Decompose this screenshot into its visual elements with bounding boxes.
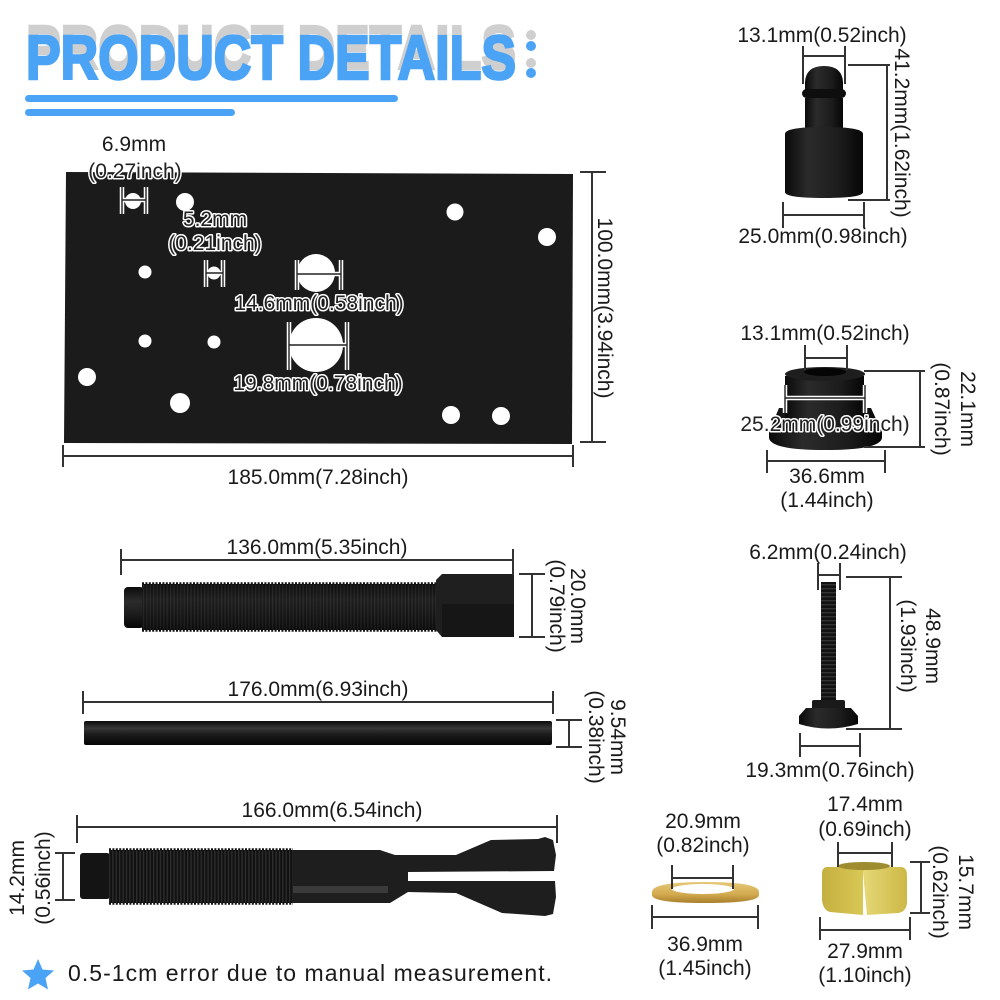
washer drawing [652, 882, 759, 903]
bolt dimensions: 136.0mm(5.35inch) [227, 536, 407, 559]
panel: mounting plate [63, 133, 616, 489]
plate height dimension [580, 172, 616, 442]
split bolt dimensions: (0.56inch) [32, 831, 55, 925]
bushing dimensions [740, 322, 979, 512]
split bolt dimensions: 14.2mm [6, 840, 29, 916]
note: measurement error [22, 959, 552, 990]
nut dimensions: 27.9mm [827, 940, 903, 963]
plate hole labels: 19.8mm(0.78inch) [233, 372, 403, 395]
split bolt dimensions: 166.0mm(6.54inch) [242, 799, 422, 822]
bolt dimensions [121, 536, 589, 653]
note text: 0.5-1cm error due to manual measurement. [68, 960, 552, 986]
panel: threaded bolt with hex head [121, 536, 589, 653]
hole dimension markers [122, 187, 347, 370]
title: product details: PRODUCT DETAILS [26, 24, 516, 93]
nut dimensions: 17.4mm [827, 793, 903, 816]
nut dimensions: (0.69inch) [818, 818, 912, 841]
rod dimensions: 9.54mm [606, 699, 629, 775]
bushing dimensions: 36.6mm [789, 465, 865, 488]
title: product details: PRODUCT DETAILS [26, 14, 516, 83]
rod dimensions: (0.38inch) [584, 690, 607, 784]
plate width dimension: 185.0mm(7.28inch) [228, 466, 408, 489]
bolt dimensions: (0.79inch) [545, 559, 568, 653]
bolt dimensions: 20.0mm [566, 568, 589, 644]
panel: smooth rod [83, 678, 629, 784]
panel: split forcing bolt [6, 799, 557, 925]
panel: flanged bushing [740, 322, 979, 512]
pin drawing [785, 66, 863, 198]
pin dimensions: 25.0mm(0.98inch) [738, 225, 908, 248]
rod dimensions: 176.0mm(6.93inch) [228, 678, 408, 701]
plate hole labels: (0.21inch) [168, 232, 262, 255]
nut dimensions [818, 793, 977, 987]
panel: thumb screw [745, 541, 944, 782]
bushing dimensions: 25.2mm(0.99inch) [740, 413, 910, 436]
pin dimensions: 13.1mm(0.52inch) [737, 24, 907, 47]
rod dimensions [83, 678, 629, 784]
washer dimensions: (1.45inch) [658, 957, 752, 980]
split bolt drawing [80, 837, 556, 916]
screw dimensions: 6.2mm(0.24inch) [749, 541, 907, 564]
panel: brass hex nut [818, 793, 977, 987]
washer dimensions: 20.9mm [665, 810, 741, 833]
screw drawing [799, 582, 858, 728]
panel: brass washer [652, 810, 759, 980]
panel: stepped pin adapter [737, 24, 913, 248]
screw dimensions: 48.9mm [921, 608, 944, 684]
bushing drawing [769, 367, 882, 450]
plate width dimension [63, 445, 573, 489]
icon: blue star [22, 959, 54, 990]
bolt drawing [124, 574, 514, 637]
plate hole labels [88, 133, 404, 395]
nut dimensions: (0.62inch) [928, 845, 951, 939]
nut drawing [822, 862, 907, 915]
screw dimensions: 19.3mm(0.76inch) [745, 759, 915, 782]
screw dimensions [745, 541, 944, 782]
split bolt dimensions [6, 799, 557, 925]
washer dimensions: 36.9mm [667, 933, 743, 956]
plate body with holes [64, 172, 573, 444]
plate hole labels: 5.2mm [183, 208, 247, 231]
nut dimensions: (1.10inch) [818, 964, 912, 987]
plate hole labels: 14.6mm(0.58inch) [234, 292, 404, 315]
plate hole labels: (0.27inch) [88, 160, 182, 183]
nut dimensions: 15.7mm [954, 854, 977, 930]
washer dimensions [652, 810, 758, 980]
title underline bars [25, 95, 398, 116]
screw dimensions: (1.93inch) [896, 599, 919, 693]
plate height dimension: 100.0mm(3.94inch) [593, 218, 616, 398]
bushing dimensions: 13.1mm(0.52inch) [740, 322, 910, 345]
bushing dimensions: (0.87inch) [930, 362, 953, 456]
bushing dimensions: 22.1mm [956, 371, 979, 447]
pin dimensions: 41.2mm(1.62inch) [890, 48, 913, 218]
washer dimensions: (0.82inch) [656, 834, 750, 857]
rod drawing [84, 721, 552, 745]
pin dimensions [737, 24, 913, 248]
plate hole labels: 6.9mm [102, 133, 166, 156]
bushing dimensions: (1.44inch) [780, 489, 874, 512]
